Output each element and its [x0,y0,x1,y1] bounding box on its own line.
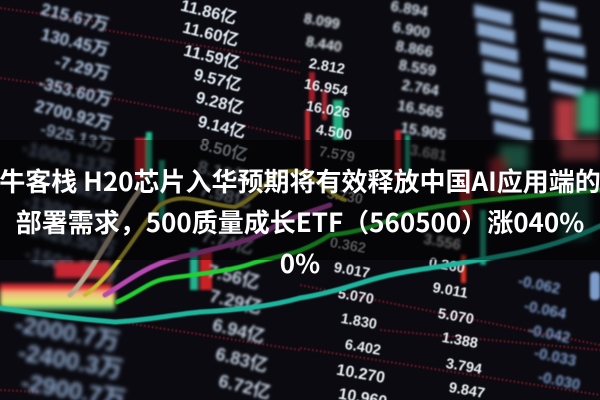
column 4: lower values [428,255,486,400]
title backdrop band [0,140,600,260]
column 3: values: 3.730 [326,186,364,208]
column 1: blurred amounts [33,0,116,156]
column 4: lower values: 9.011 [431,280,469,302]
column 1: blurred amounts: 130.45万 [39,25,111,60]
column 1: blurred amounts: -925.13万 [39,119,116,156]
column 2: blurred lower amounts: 8.10亿 [196,157,252,189]
blurred right candles [490,92,600,240]
column 6: lower right values [517,272,582,394]
column 2: amounts in 亿: 8.50亿 [198,135,250,165]
column 6: lower right values: -0.030 [537,368,582,394]
column 3: values: 5.070 [337,286,375,308]
column 1: large lower blobs [13,311,128,400]
candlesticks [135,72,486,290]
column 1: blobs behind title: -1280.62万 [20,164,116,207]
column 1: blobs behind title [20,138,119,287]
column 3: values: 6.402 [344,337,382,359]
column 2: blurred lower amounts: 7.56亿 [206,261,262,293]
column 3: values: 4.500 [315,122,353,144]
column 1: large lower blobs: -2000.7万 [13,311,122,356]
column 4: lower values: 5.070 [437,306,475,328]
column 2: amounts in 亿: 9.14亿 [196,112,248,142]
column 2: blurred lower amounts [196,157,273,400]
column 1: large lower blobs: -2400.3万 [16,339,125,384]
column 4: lower values: 0.260 [428,255,466,277]
column 4: blurred upper values: 6.900 [391,19,431,42]
column 4: blurred upper values: 8.866 [394,38,434,61]
column 1: blobs behind title: -1000.13万 [20,138,116,181]
title: 牛客栈 H20芯片入华预期将有效释放中国AI应用端的 [0,162,600,199]
column 3: values: 2.812 [308,56,346,78]
column 2: amounts in 亿: 11.60亿 [181,18,241,50]
column 5: blurred values [474,0,586,142]
column 4: blurred upper values: 15.905 [399,119,447,144]
column 4: lower values: 1.388 [441,330,479,352]
column 1: blurred amounts: 2700.92万 [33,96,114,134]
column 3: blurred upper values: 8.099 [303,11,341,33]
title: 部署需求，500质量成长ETF（560500）涨040% [16,203,584,240]
column 4: blurred upper values: 3.556 [422,231,462,254]
column 2: amounts in 亿 [179,0,250,165]
column 4: blurred upper values: 16.565 [396,97,444,122]
column 2: blurred lower amounts: 7.74亿 [200,226,256,258]
column 4: blurred upper values: 8.559 [397,57,437,80]
rainbow moving-average cluster [0,262,115,310]
column 4: blurred upper values: 2.764 [400,77,441,100]
column 1: blurred amounts: -353.60万 [37,73,114,110]
column 6: lower right values: -0.042 [527,321,572,347]
column 3: values: 9.017 [333,260,371,282]
column 2: amounts in 亿: 11.59亿 [182,41,242,73]
column 3: values: 7.579 [318,144,356,166]
column 6: lower right values: -0.064 [523,297,568,323]
column 1: blurred amounts: 215.67万 [39,0,111,35]
column 3: values [303,56,388,400]
title: 0% [280,244,320,281]
column 4: blurred upper values [389,0,462,254]
moving average lines [0,171,600,322]
column 1: blobs behind title: -1500.10万 [23,244,119,287]
column 3: values: 16.954 [303,76,349,100]
column 1: blobs behind title: -1300.62万 [22,192,118,235]
column 1: blurred amounts: -7.29万 [53,52,112,84]
column 2: blurred lower amounts: 7.98亿 [198,180,254,212]
column 3: blurred upper values: 8.440 [305,34,343,56]
column 4: blurred upper values: 3.681 [408,142,448,165]
column 6: lower right values: -0.033 [533,344,578,370]
column 2: amounts in 亿: 9.57亿 [192,65,244,95]
column 1: blobs behind title: -1420.50万 [22,218,118,261]
column 3: values: 0.362 [329,235,367,257]
column 3: values: 1.830 [340,311,378,333]
column 3: values: 16.026 [305,98,351,122]
column 4: lower values: 3.794 [445,356,483,378]
title [0,162,600,281]
column 3: blurred upper values [303,11,343,56]
column 2: blurred lower amounts: 6.94亿 [211,315,267,347]
column 6: lower right values: -0.062 [517,272,562,298]
column 2: blurred lower amounts: 6.83亿 [214,344,270,376]
column 2: amounts in 亿: 9.28亿 [194,88,246,118]
column 2: blurred lower amounts: 7.29亿 [208,286,264,318]
column 3: values: 10.270 [335,362,386,387]
